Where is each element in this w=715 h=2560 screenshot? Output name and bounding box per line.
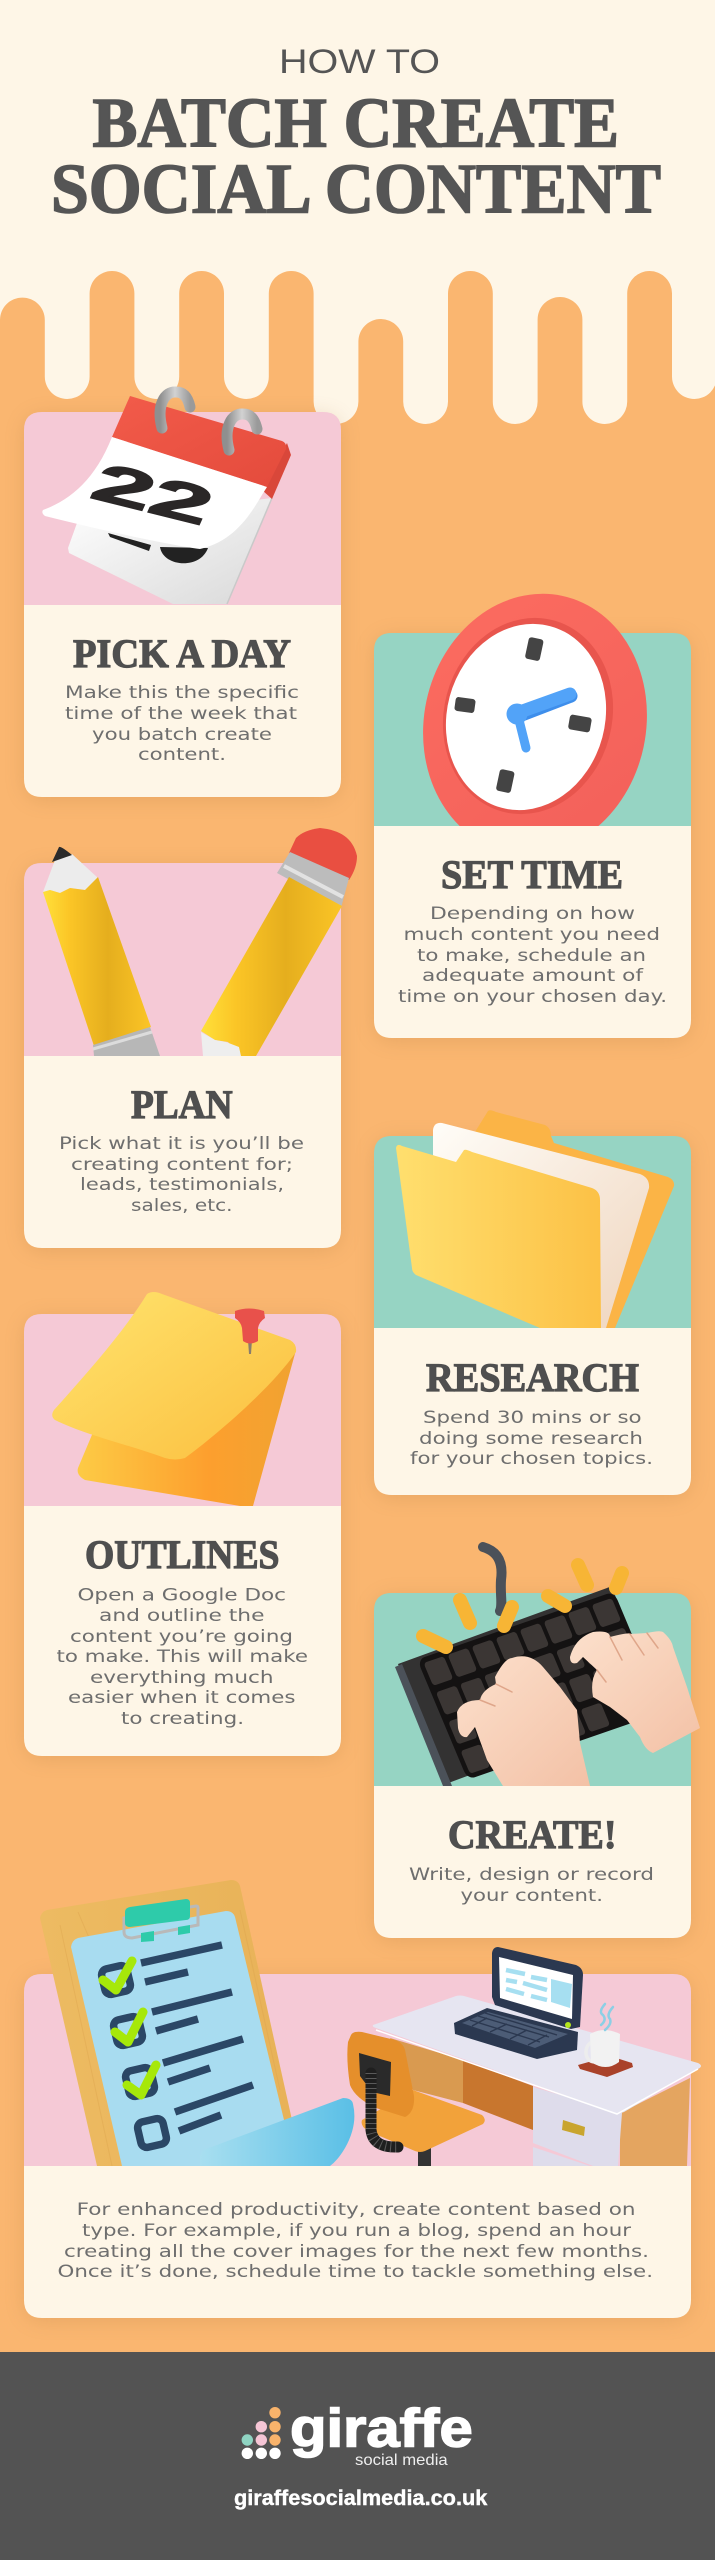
- icon: folder: [396, 1110, 674, 1328]
- icon: left pencil: [43, 847, 160, 1056]
- text: research: [410, 1408, 653, 1469]
- icon: right pencil: [201, 828, 357, 1056]
- text: plan: leads, testimonials,: [80, 1175, 284, 1195]
- heading: plan: PLAN: [131, 1082, 233, 1127]
- icon: red pin: [235, 1308, 265, 1354]
- text: outlines: everything much: [90, 1668, 274, 1688]
- text: set time: adequate amount of: [422, 966, 644, 986]
- icon: laptop: [454, 1947, 583, 2059]
- text: set time: Depending on how: [430, 904, 635, 924]
- heading: research: RESEARCH: [426, 1355, 639, 1400]
- text: plan: [59, 1134, 304, 1216]
- text: pick a day: time of the week that: [65, 704, 297, 724]
- title block: [51, 43, 661, 228]
- text: plan: creating content for;: [71, 1155, 293, 1175]
- website url: giraffesocialmedia.co.uk: [234, 2487, 488, 2510]
- icon: clip: [124, 1899, 198, 1942]
- text: plan: sales, etc.: [131, 1196, 232, 1216]
- text: create: [409, 1865, 654, 1906]
- icon: tear-off calendar: 22: [83, 452, 223, 537]
- text: set time: to make, schedule an: [417, 946, 646, 966]
- logo: dot mark: [242, 2407, 281, 2459]
- title: how to: HOW TO: [279, 43, 440, 81]
- text: productivity tip: [58, 2200, 653, 2282]
- text: pick a day: Make this the specific: [65, 683, 299, 703]
- text: outlines: content you’re going: [70, 1627, 293, 1647]
- panel: outlines: [24, 1292, 341, 1759]
- text: outlines: [56, 1586, 308, 1729]
- text: create: your content.: [460, 1886, 603, 1906]
- text: productivity tip: type. For example, if you run a blog, spend an hour: [82, 2221, 631, 2241]
- panel: create: [374, 1547, 700, 1941]
- logo: giraffe wordmark: giraffe: [290, 2399, 473, 2459]
- heading: set time: SET TIME: [441, 852, 623, 897]
- text: set time: much content you need: [404, 925, 660, 945]
- text: outlines: to creating.: [121, 1709, 244, 1729]
- panel: pick a day: [24, 392, 341, 800]
- footer band: [0, 2352, 715, 2560]
- text: pick a day: content.: [138, 745, 226, 765]
- text: outlines: easier when it comes: [68, 1688, 296, 1708]
- heading: create: CREATE!: [448, 1812, 616, 1857]
- text: pick a day: you batch create: [92, 725, 272, 745]
- text: outlines: and outline the: [99, 1606, 264, 1626]
- text: productivity tip: Once it’s done, schedule time to tackle something else.: [58, 2262, 653, 2282]
- icon: coaster and mug: [578, 2004, 633, 2077]
- text: productivity tip: For enhanced productivity, create content based on: [77, 2200, 636, 2220]
- text: create: Write, design or record: [409, 1865, 654, 1885]
- text: set time: time on your chosen day.: [398, 987, 667, 1007]
- icon: keyboard and typing hands: [395, 1547, 700, 1786]
- icon: drawer handle: [562, 2120, 585, 2136]
- title: social content: SOCIAL CONTENT: [51, 150, 661, 228]
- text: outlines: to make. This will make: [56, 1647, 308, 1667]
- text: research: Spend 30 mins or so: [423, 1408, 642, 1428]
- panel: set time: [374, 573, 691, 1041]
- icon: desk with laptop and chair: [347, 1947, 701, 2166]
- panel: productivity tip: [24, 1880, 701, 2321]
- panel: research: [374, 1110, 691, 1498]
- text: research: for your chosen topics.: [410, 1449, 653, 1469]
- heading: pick a day: PICK A DAY: [73, 631, 291, 676]
- logo: social media: social media: [355, 2452, 448, 2469]
- title: batch create: BATCH CREATE: [92, 84, 619, 162]
- icon: wall clock: [399, 573, 671, 875]
- icon: clipboard checklist: [40, 1880, 354, 2166]
- text: plan: Pick what it is you’ll be: [59, 1134, 304, 1154]
- icon: pinned sticky note: [52, 1292, 296, 1506]
- text: set time: [398, 904, 667, 1007]
- heading: outlines: OUTLINES: [85, 1532, 280, 1577]
- text: research: doing some research: [419, 1429, 643, 1449]
- text: pick a day: [65, 683, 299, 765]
- icon: tear-off calendar: [42, 392, 291, 604]
- icon: orange chair: [347, 2032, 485, 2166]
- text: outlines: Open a Google Doc: [78, 1586, 286, 1606]
- panel: plan: [24, 828, 357, 1251]
- text: productivity tip: creating all the cover images for the next few months.: [64, 2242, 649, 2262]
